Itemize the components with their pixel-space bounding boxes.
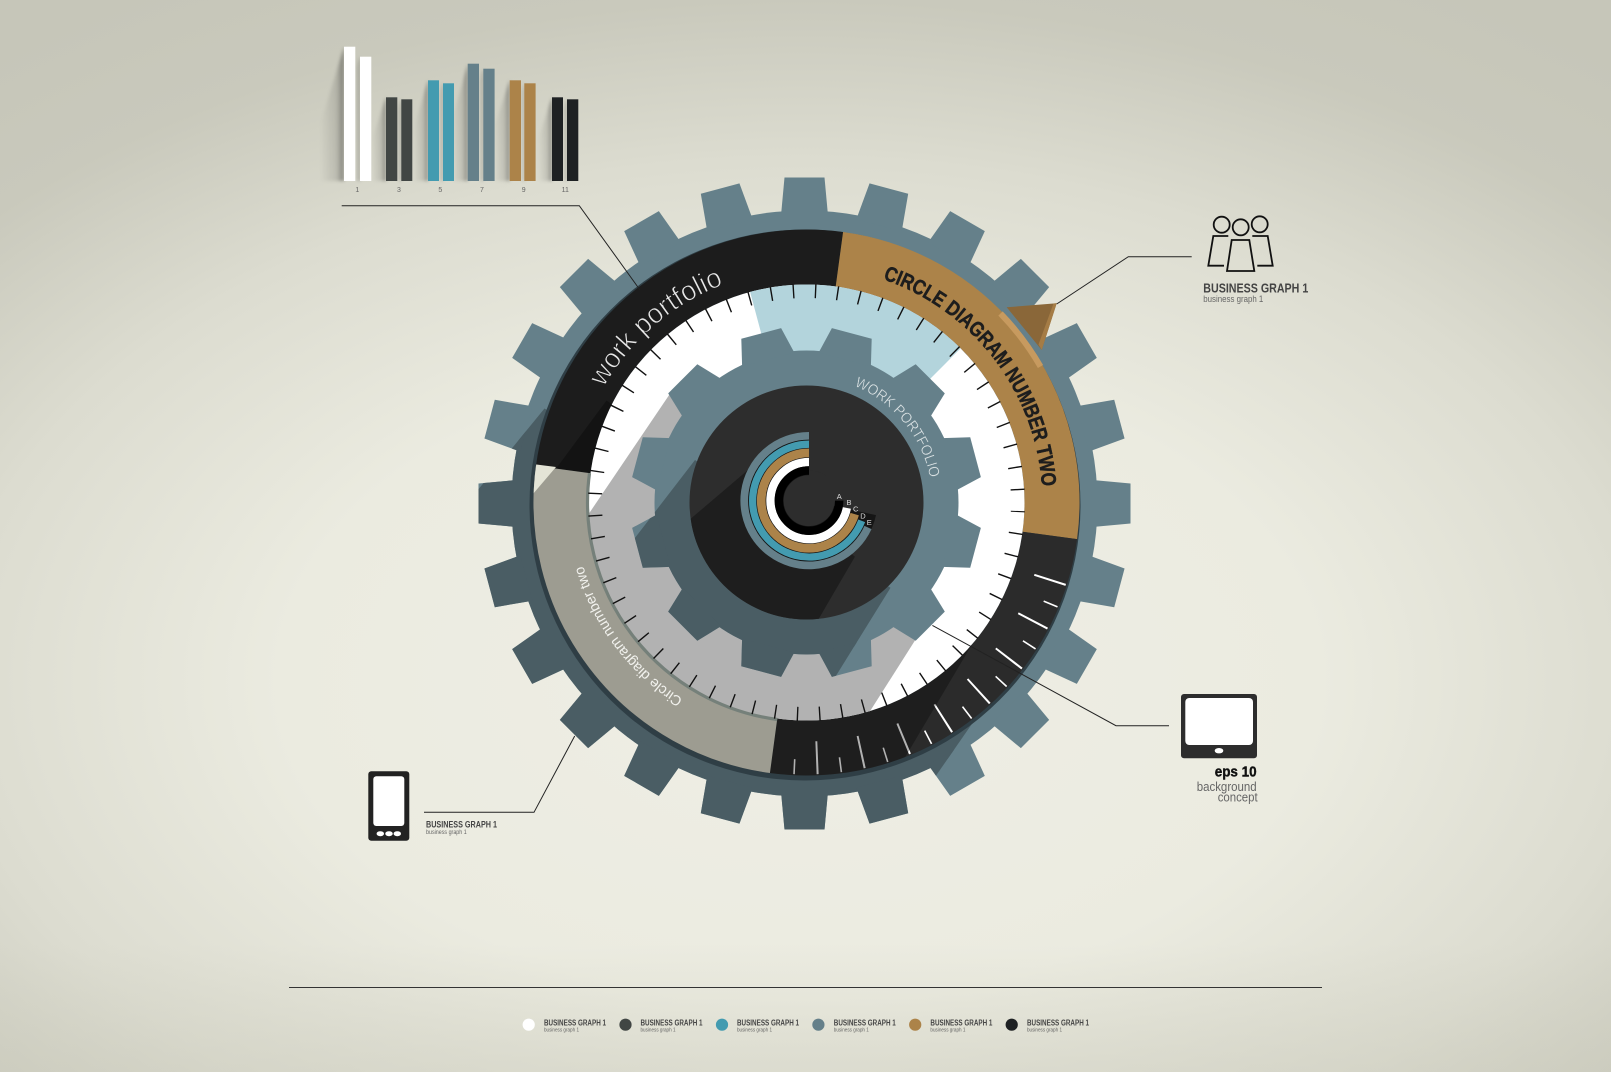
ribbon edge highlight [1000, 314, 1040, 366]
legend item: black: business graph 1 [1027, 1027, 1062, 1033]
legend item: dark grey [619, 1018, 703, 1033]
curved label: work portfolio: WORK PORTFOLIO [856, 376, 940, 476]
ring labels A to E: E [867, 518, 872, 527]
icon: phone [368, 771, 409, 841]
long white ticks [815, 579, 1050, 758]
divider line [289, 986, 1322, 988]
bar axis labels: 5 [438, 187, 442, 194]
legend [523, 1018, 1089, 1033]
ring labels A to E: A [837, 492, 842, 501]
bar shadows [320, 47, 567, 181]
icon: people [1208, 216, 1273, 271]
leader: tablet [932, 625, 1169, 726]
white scale ring [588, 284, 1024, 720]
band shadow [556, 401, 972, 776]
gear diagram [478, 178, 1130, 830]
text: tablet caption: background [1197, 779, 1257, 794]
legend item: teal: business graph 1 [737, 1027, 772, 1033]
leader: bar chart [342, 206, 640, 290]
cream highlight on grey band [532, 464, 556, 494]
text: phone caption: BUSINESS GRAPH 1 [426, 820, 497, 830]
text: people caption: BUSINESS GRAPH 1 [1203, 280, 1308, 296]
text: people caption: business graph 1 [1203, 294, 1263, 304]
leader: phone [424, 736, 575, 812]
bar axis labels: 3 [397, 187, 401, 194]
legend item: dark grey: BUSINESS GRAPH 1 [640, 1018, 703, 1028]
ring labels A to E: D [860, 512, 866, 520]
segment: grey band [561, 470, 774, 746]
bar axis labels: 11 [562, 187, 569, 194]
legend item: black: BUSINESS GRAPH 1 [1027, 1018, 1089, 1028]
ring labels A to E: C [853, 504, 859, 514]
short white ticks [793, 603, 1051, 767]
segment: circle diagram number two band [839, 259, 1052, 535]
segment: dark scale band [774, 535, 1050, 748]
icon: tablet [1181, 694, 1257, 758]
legend item: slate: BUSINESS GRAPH 1 [834, 1018, 896, 1028]
bar axis labels: 1 [355, 187, 359, 194]
legend item: dark grey: business graph 1 [640, 1027, 676, 1033]
legend item: white: business graph 1 [544, 1027, 579, 1033]
legend item: tan: business graph 1 [930, 1027, 965, 1033]
text: tablet caption: concept [1218, 789, 1258, 804]
bar chart [320, 47, 578, 194]
curved label: circle diagram number two: Circle diagram number two [576, 567, 681, 706]
bars [344, 47, 578, 181]
legend item: white [523, 1018, 606, 1033]
inner gear [630, 326, 983, 679]
legend item: white: BUSINESS GRAPH 1 [544, 1018, 606, 1028]
curved title: work portfolio: work portfolio [592, 273, 720, 384]
text: phone caption: business graph 1 [426, 830, 467, 836]
ring labels A to E [837, 492, 872, 527]
leader: people [1057, 257, 1192, 304]
legend item: tan: BUSINESS GRAPH 1 [930, 1018, 993, 1028]
outer gear [478, 178, 1130, 830]
legend item: black [1006, 1018, 1089, 1033]
concentric ring chart [744, 436, 868, 565]
legend item: teal [716, 1018, 799, 1033]
central disk [690, 386, 924, 620]
ring labels A to E: B [846, 498, 852, 507]
legend item: tan [909, 1018, 993, 1033]
text: tablet caption [1197, 764, 1258, 804]
light blue sector [750, 285, 961, 502]
text: tablet caption: eps 10 [1215, 764, 1257, 781]
icon: folded ribbon [1007, 303, 1057, 350]
legend item: teal: BUSINESS GRAPH 1 [737, 1018, 799, 1028]
bar axis labels: 7 [480, 187, 484, 194]
legend item: slate [812, 1018, 896, 1033]
grey band inner rim [588, 473, 777, 720]
bar axis labels: 9 [522, 187, 526, 194]
bar axis labels [355, 187, 569, 194]
legend item: slate: business graph 1 [834, 1027, 869, 1033]
scale ticks [586, 282, 1027, 723]
segment: work portfolio band [563, 257, 839, 470]
leader lines [342, 206, 1192, 812]
grey long shadow [590, 395, 915, 720]
text: phone caption [426, 820, 497, 836]
curved title: circle diagram number two: CIRCLE DIAGRAM NUMBER TWO [885, 267, 1056, 486]
text: people caption [1203, 280, 1308, 304]
